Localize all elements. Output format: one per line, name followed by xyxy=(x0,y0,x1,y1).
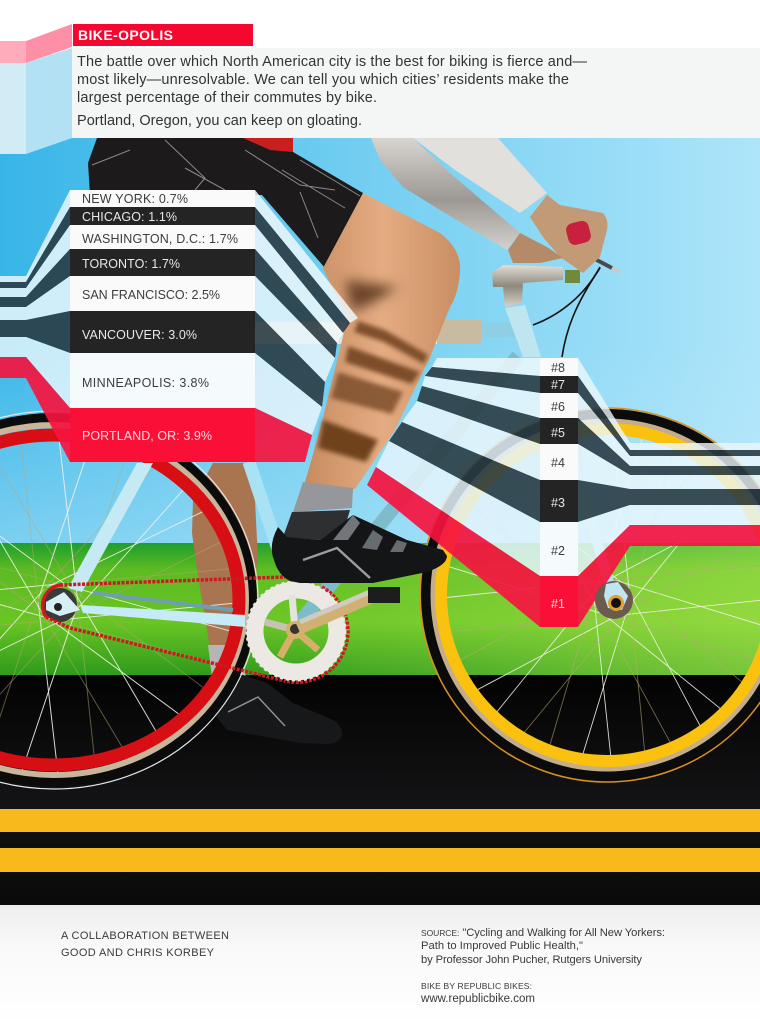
title banner: BIKE-OPOLIS xyxy=(78,27,173,43)
photo: cyclist on bike xyxy=(0,138,760,905)
rank 4: #4 xyxy=(551,456,565,470)
footer: bike credit xyxy=(420,981,535,1005)
Washington row: WASHINGTON, D.C.: 1.7% xyxy=(82,232,238,246)
rider back leg xyxy=(192,463,342,744)
footer: bike credit: BIKE BY REPUBLIC BIKES: xyxy=(421,981,532,991)
rank 8 xyxy=(540,358,578,376)
San Francisco row xyxy=(70,276,255,311)
footer: credit: A COLLABORATION BETWEEN xyxy=(61,930,229,942)
Washington row xyxy=(70,225,255,249)
rank 5: #5 xyxy=(551,426,565,440)
Toronto row xyxy=(70,249,255,276)
grass highlight xyxy=(0,543,760,675)
intro text panel: largest percentage of their commutes by bike. xyxy=(77,90,377,106)
chart: city commute share ribbons (left) xyxy=(0,190,358,462)
sky lower haze xyxy=(0,340,760,544)
intro text panel: The battle over which North American city is the best for biking is fierce and— xyxy=(77,54,588,70)
footer: source: Path to Improved Public Health," xyxy=(421,940,583,952)
rider arms and hands xyxy=(371,138,608,273)
rank 5 xyxy=(540,418,578,444)
Minneapolis row: MINNEAPOLIS: 3.8% xyxy=(82,376,209,390)
head tube and stem xyxy=(492,258,620,357)
rank 3: #3 xyxy=(551,496,565,510)
ribbons right of rank column xyxy=(578,358,760,627)
Vancouver row: VANCOUVER: 3.0% xyxy=(82,328,197,342)
rider shorts xyxy=(88,138,363,268)
front wheel xyxy=(420,408,760,782)
rank 4 xyxy=(540,444,578,480)
rank 3 xyxy=(540,480,578,522)
Minneapolis row xyxy=(70,353,255,408)
right ribbon tails xyxy=(255,190,358,462)
footer: credit xyxy=(61,930,229,959)
Portland row xyxy=(70,408,255,462)
Vancouver row xyxy=(70,311,255,353)
Chicago row: CHICAGO: 1.1% xyxy=(82,210,177,224)
Toronto row: TORONTO: 1.7% xyxy=(82,257,180,271)
shaved-leg hair bands xyxy=(318,321,428,462)
title banner xyxy=(73,24,253,46)
footer panel xyxy=(0,905,760,1024)
rank 8: #8 xyxy=(551,361,565,375)
rank 7: #7 xyxy=(551,378,565,392)
rank 6: #6 xyxy=(551,400,565,414)
rear wheel xyxy=(0,411,258,789)
footer: source: by Professor John Pucher, Rutgers University xyxy=(421,954,642,966)
road markings: double yellow line xyxy=(0,809,760,872)
footer: credit: GOOD AND CHRIS KORBEY xyxy=(61,947,215,959)
rider front leg xyxy=(303,193,460,489)
chainring xyxy=(247,582,372,682)
left ribbon tails xyxy=(0,190,70,462)
bike frame xyxy=(68,330,612,627)
rear cog and chain xyxy=(43,577,285,681)
front wheel hub xyxy=(595,581,633,619)
rank 2 xyxy=(540,522,578,576)
New York row xyxy=(70,190,255,207)
chart: rank ribbons (right) xyxy=(367,358,760,627)
rank 7 xyxy=(540,376,578,393)
Portland row: PORTLAND, OR: 3.9% xyxy=(82,429,212,443)
rank 6 xyxy=(540,393,578,418)
intro text panel xyxy=(72,48,760,138)
rank 1: #1 xyxy=(551,597,565,611)
rank 1 xyxy=(540,576,578,627)
footer: source xyxy=(421,927,665,966)
intro text panel: Portland, Oregon, you can keep on gloating. xyxy=(77,113,362,129)
sky backdrop xyxy=(0,138,760,544)
Chicago row xyxy=(70,207,255,225)
ribbons left of rank column xyxy=(367,358,540,627)
rank 2: #2 xyxy=(551,544,565,558)
grass band xyxy=(0,543,760,675)
footer: source: SOURCE: "Cycling and Walking for All New Yorkers: xyxy=(421,927,665,939)
front shoe and sock xyxy=(272,482,447,603)
header: decorative ribbon folds xyxy=(0,24,72,154)
New York row: NEW YORK: 0.7% xyxy=(82,192,188,206)
intro text panel: most likely—unresolvable. We can tell you which cities’ residents make the xyxy=(77,72,569,88)
road xyxy=(0,675,760,905)
footer: bike credit: www.republicbike.com xyxy=(420,993,535,1005)
San Francisco row: SAN FRANCISCO: 2.5% xyxy=(82,288,220,302)
